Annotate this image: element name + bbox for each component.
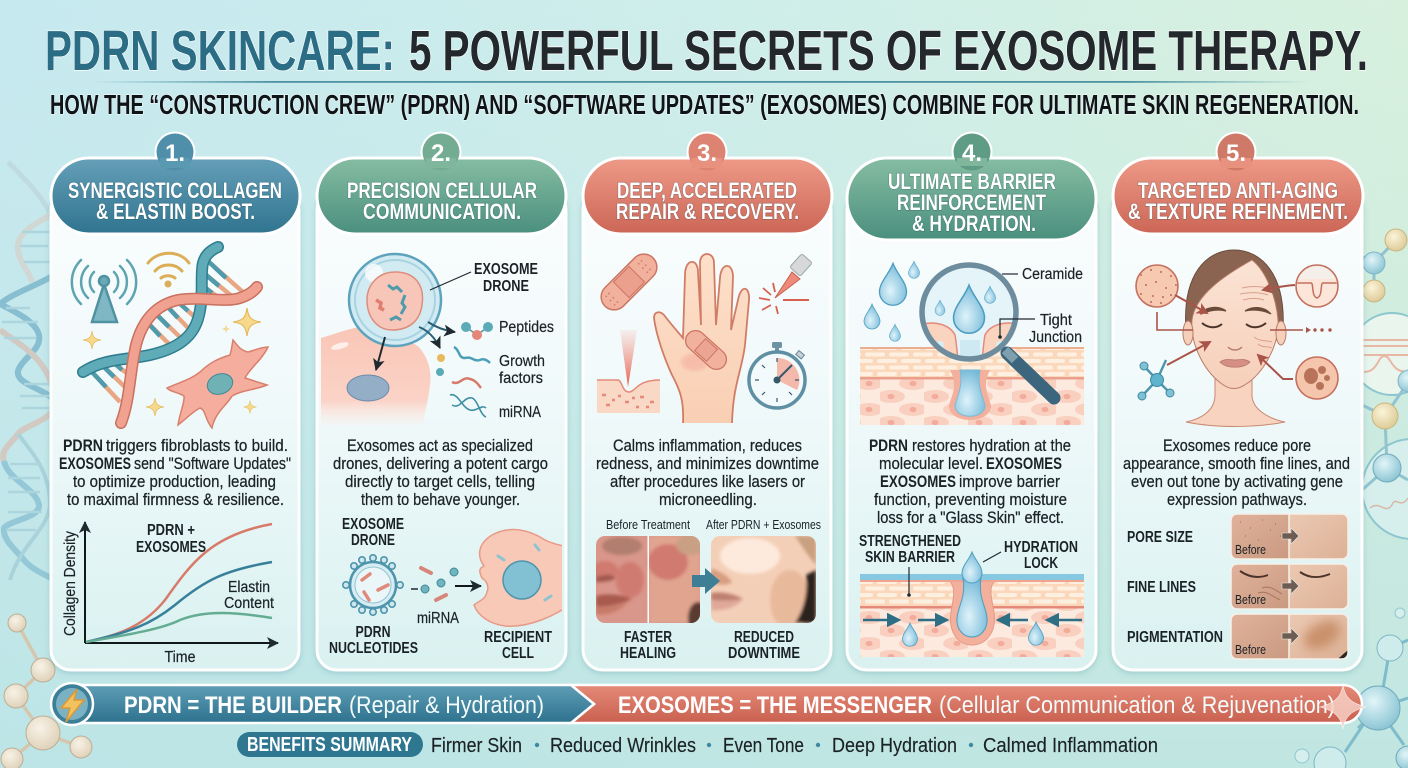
comparison row: fine lines: Before [1235, 593, 1266, 607]
comparison row: fine lines: FINE LINES [1127, 579, 1196, 596]
panel 4 description: function, preventing moisture [874, 491, 1067, 509]
diagram: strengthened skin barrier and hydration lock: STRENGTHENED [859, 533, 961, 550]
panel 1 description: send "Software Updates" [134, 455, 291, 473]
panel 3 description: Calms inflammation, reduces [613, 437, 802, 455]
icon: drone vesicle with spikes [343, 555, 403, 615]
diagram: exosome drone to recipient cell: miRNA [417, 610, 460, 627]
cargo: peptides: Peptides [499, 319, 554, 336]
line chart: collagen density over time: Time [164, 649, 196, 666]
panel 5 description [1123, 437, 1350, 509]
comparison row: fine lines [1127, 564, 1348, 609]
panel 5 description: Exosomes reduce pore [1163, 437, 1311, 455]
panel 5 header: TARGETED ANTI-AGING [1138, 178, 1338, 203]
icon: fibroblast cell [167, 340, 268, 428]
panel 4 description: molecular level. [879, 455, 983, 473]
icon: water drops [864, 261, 920, 341]
panel 2 description: Exosomes act as specialized [347, 437, 533, 455]
panel 5 header [1113, 133, 1363, 234]
coral messenger band: EXOSOMES = THE MESSENGER [618, 692, 932, 719]
label: exosome drone [430, 261, 538, 295]
diagram: exosome drone to recipient cell: RECIPIENT [484, 629, 552, 646]
comparison row: pigmentation [1127, 614, 1348, 659]
comparison row: pigmentation: PIGMENTATION [1127, 629, 1223, 646]
diagram: exosome drone to recipient cell: CELL [502, 645, 534, 662]
cargo: miRNA: miRNA [499, 404, 542, 421]
diagram: exosome drone to recipient cell: NUCLEOTIDES [329, 640, 418, 657]
panel 3 description: after procedures like lasers or [610, 473, 805, 491]
benefits summary [237, 732, 1158, 757]
panel 5 card [1113, 190, 1362, 670]
benefits summary: Deep Hydration [832, 735, 957, 757]
panel 4 description: improve barrier [959, 473, 1060, 491]
cargo: growth factors: Growth [499, 353, 545, 370]
line chart: collagen density over time: EXOSOMES [136, 539, 206, 556]
before and after comparison: DOWNTIME [728, 645, 800, 662]
panel 4 description [869, 437, 1071, 527]
panel 3 description: microneedling. [659, 491, 757, 509]
panel 2: precision cellular communication [317, 133, 570, 670]
diagram: strengthened skin barrier and hydration lock [859, 533, 1084, 657]
panel 2 description: drones, delivering a potent cargo [333, 455, 548, 473]
comparison row: pore size: PORE SIZE [1127, 529, 1193, 546]
callout: wrinkle circle [1263, 265, 1338, 307]
photo placeholder: inflamed skin [596, 536, 700, 623]
diagram: exosome drone to recipient cell: PDRN [356, 624, 390, 641]
panel 3 header: 3. [697, 140, 717, 167]
before and after comparison [592, 518, 821, 662]
panel 4 description: EXOSOMES [880, 473, 956, 491]
label: ceramide: Ceramide [1022, 266, 1083, 283]
panel 5: targeted anti-aging and texture refinement [1113, 133, 1363, 670]
panel 3 header: DEEP, ACCELERATED [617, 178, 797, 203]
panel 2 header [317, 133, 566, 234]
icon: signal antenna [72, 260, 136, 322]
label: exosome drone: EXOSOME [474, 261, 538, 278]
benefits summary: Firmer Skin [431, 735, 522, 757]
panel 4 header: ULTIMATE BARRIER [888, 169, 1056, 194]
diagram: exosome drone to recipient cell [329, 516, 570, 662]
panel 5 description: appearance, smooth fine lines, and [1123, 455, 1350, 473]
panel 5 header: 5. [1226, 140, 1246, 167]
panel 5 description: expression pathways. [1167, 491, 1307, 509]
comparison row: pigmentation: Before [1235, 643, 1266, 657]
panel 4 header: 4. [962, 140, 982, 167]
panel 1 description: to maximal firmness & resilience. [67, 491, 284, 509]
icon: laser skin treatment [597, 330, 660, 413]
illustration: skin layers [860, 347, 1084, 425]
callout: pore circle [1136, 265, 1207, 330]
label: tight junction [998, 312, 1082, 346]
icon: lightning badge [51, 683, 93, 725]
diagram: strengthened skin barrier and hydration lock: SKIN BARRIER [865, 549, 955, 566]
panel 1 header: & ELASTIN BOOST. [96, 199, 255, 224]
panel 1: synergistic collagen and elastin boost [51, 133, 300, 670]
panel 2 header: COMMUNICATION. [363, 199, 521, 224]
label: tight junction: Tight [1040, 312, 1073, 329]
panel 5 description: even out tone by activating gene [1131, 473, 1343, 491]
bottom banner: builder and messenger [51, 683, 1366, 729]
panel 1 description: EXOSOMES [59, 455, 131, 473]
photo placeholder: healed skin [711, 536, 816, 630]
diagram: exosome drone to recipient cell: DRONE [351, 532, 395, 549]
illustration: woman's face [1183, 250, 1286, 426]
panel 4 description: loss for a "Glass Skin" effect. [877, 509, 1064, 527]
icon: hand with bandage [654, 254, 749, 423]
panel 2 description: directly to target cells, telling [345, 473, 535, 491]
icon: gold sparkles [83, 308, 261, 416]
panel 3 description [596, 437, 819, 509]
label: tight junction: Junction [1029, 329, 1082, 346]
panel 2 header: PRECISION CELLULAR [347, 178, 537, 203]
before and after comparison: HEALING [620, 645, 676, 662]
benefits summary: Calmed Inflammation [983, 735, 1158, 757]
benefits summary: Reduced Wrinkles [550, 735, 696, 757]
panel 4 description: restores hydration at the [912, 437, 1071, 455]
coral messenger band [571, 685, 1362, 723]
before and after comparison: REDUCED [734, 629, 794, 646]
coral messenger band: (Cellular Communication & Rejuvenation) [939, 692, 1335, 719]
panel 1 description [59, 437, 291, 509]
icon: recipient cell [474, 530, 570, 626]
panel 2 description: them to behave younger. [361, 491, 520, 509]
diagram: strengthened skin barrier and hydration lock: LOCK [1024, 555, 1059, 572]
panel 4 card [847, 190, 1096, 670]
panel 2 header: 2. [431, 140, 451, 167]
cargo: growth factors: factors [499, 370, 543, 387]
panel 1 description: PDRN [63, 437, 103, 455]
panel 4 header: & HYDRATION. [912, 211, 1036, 236]
cargo: peptides [461, 319, 554, 340]
cargo: miRNA [450, 395, 542, 421]
callout: dotted pointer [1270, 327, 1332, 333]
icon: bandage [596, 249, 662, 315]
panel 4: ultimate barrier reinforcement and hydration [847, 133, 1096, 670]
before and after comparison: FASTER [624, 629, 672, 646]
line chart: collagen density over time: Content [224, 595, 275, 612]
benefits summary: Even Tone [723, 735, 804, 757]
icon: laser pen with sparks [759, 254, 812, 314]
panel 1 description: to optimize production, leading [73, 473, 276, 491]
panel 1 description: triggers fibroblasts to build. [106, 437, 288, 455]
decoration: molecules and spheres at right edge [1295, 229, 1408, 768]
comparison row: pore size [1127, 514, 1348, 559]
label: ceramide [1002, 266, 1083, 283]
panel 3 header [583, 133, 832, 234]
decoration: DNA helix at left edge [0, 162, 59, 583]
teal builder band [72, 685, 594, 723]
callout: molecule [1138, 342, 1210, 400]
icon: sparkle at banner end [1320, 685, 1366, 729]
panel 3 card [583, 190, 831, 670]
panel 2 card [317, 190, 566, 670]
icon: magnifying glass over hydrated skin [920, 265, 1054, 398]
diagram: strengthened skin barrier and hydration lock: HYDRATION [1004, 539, 1078, 556]
panel 2 description [333, 437, 548, 509]
cargo: growth factors [436, 347, 545, 388]
label: exosome drone: DRONE [483, 278, 529, 295]
illustration: exosome drone delivering cargo [321, 254, 455, 425]
panel 4 header: REINFORCEMENT [897, 190, 1046, 215]
icon: DNA double helix [83, 247, 257, 423]
panel 1 header [51, 133, 300, 234]
icon: wifi [148, 253, 189, 288]
decoration: molecule at bottom left [1, 614, 92, 768]
title: PDRN SKINCARE: [45, 19, 395, 83]
line chart: collagen density over time: Collagen Density [62, 531, 79, 636]
panel 4 description: EXOSOMES [986, 455, 1062, 473]
panel 1 header: 1. [165, 140, 185, 167]
icon: stopwatch [749, 342, 805, 408]
panel 3: deep accelerated repair and recovery [583, 133, 832, 670]
arrow: before to after [692, 568, 720, 594]
line chart: collagen density over time: Elastin [228, 579, 270, 596]
panel 4 description: PDRN [869, 437, 908, 455]
panel 3 description: redness, and minimizes downtime [596, 455, 819, 473]
teal builder band: PDRN = THE BUILDER [124, 692, 342, 719]
before and after comparison: After PDRN + Exosomes [706, 518, 821, 532]
panel 5 header: & TEXTURE REFINEMENT. [1128, 199, 1348, 224]
summary pill: BENEFITS SUMMARY [247, 734, 413, 756]
panel 4 header [847, 133, 1096, 240]
diagram: exosome drone to recipient cell: EXOSOME [342, 516, 404, 533]
panel 1 header: SYNERGISTIC COLLAGEN [68, 178, 282, 203]
line chart: collagen density over time [62, 522, 278, 666]
panel 3 header: REPAIR & RECOVERY. [616, 199, 799, 224]
line chart: collagen density over time: PDRN + [147, 522, 195, 539]
comparison row: pore size: Before [1235, 543, 1266, 557]
panel 1 card [51, 190, 299, 670]
teal builder band: (Repair & Hydration) [349, 692, 544, 719]
callout: pigmentation circle [1258, 355, 1338, 399]
before and after comparison: Before Treatment [606, 518, 690, 532]
